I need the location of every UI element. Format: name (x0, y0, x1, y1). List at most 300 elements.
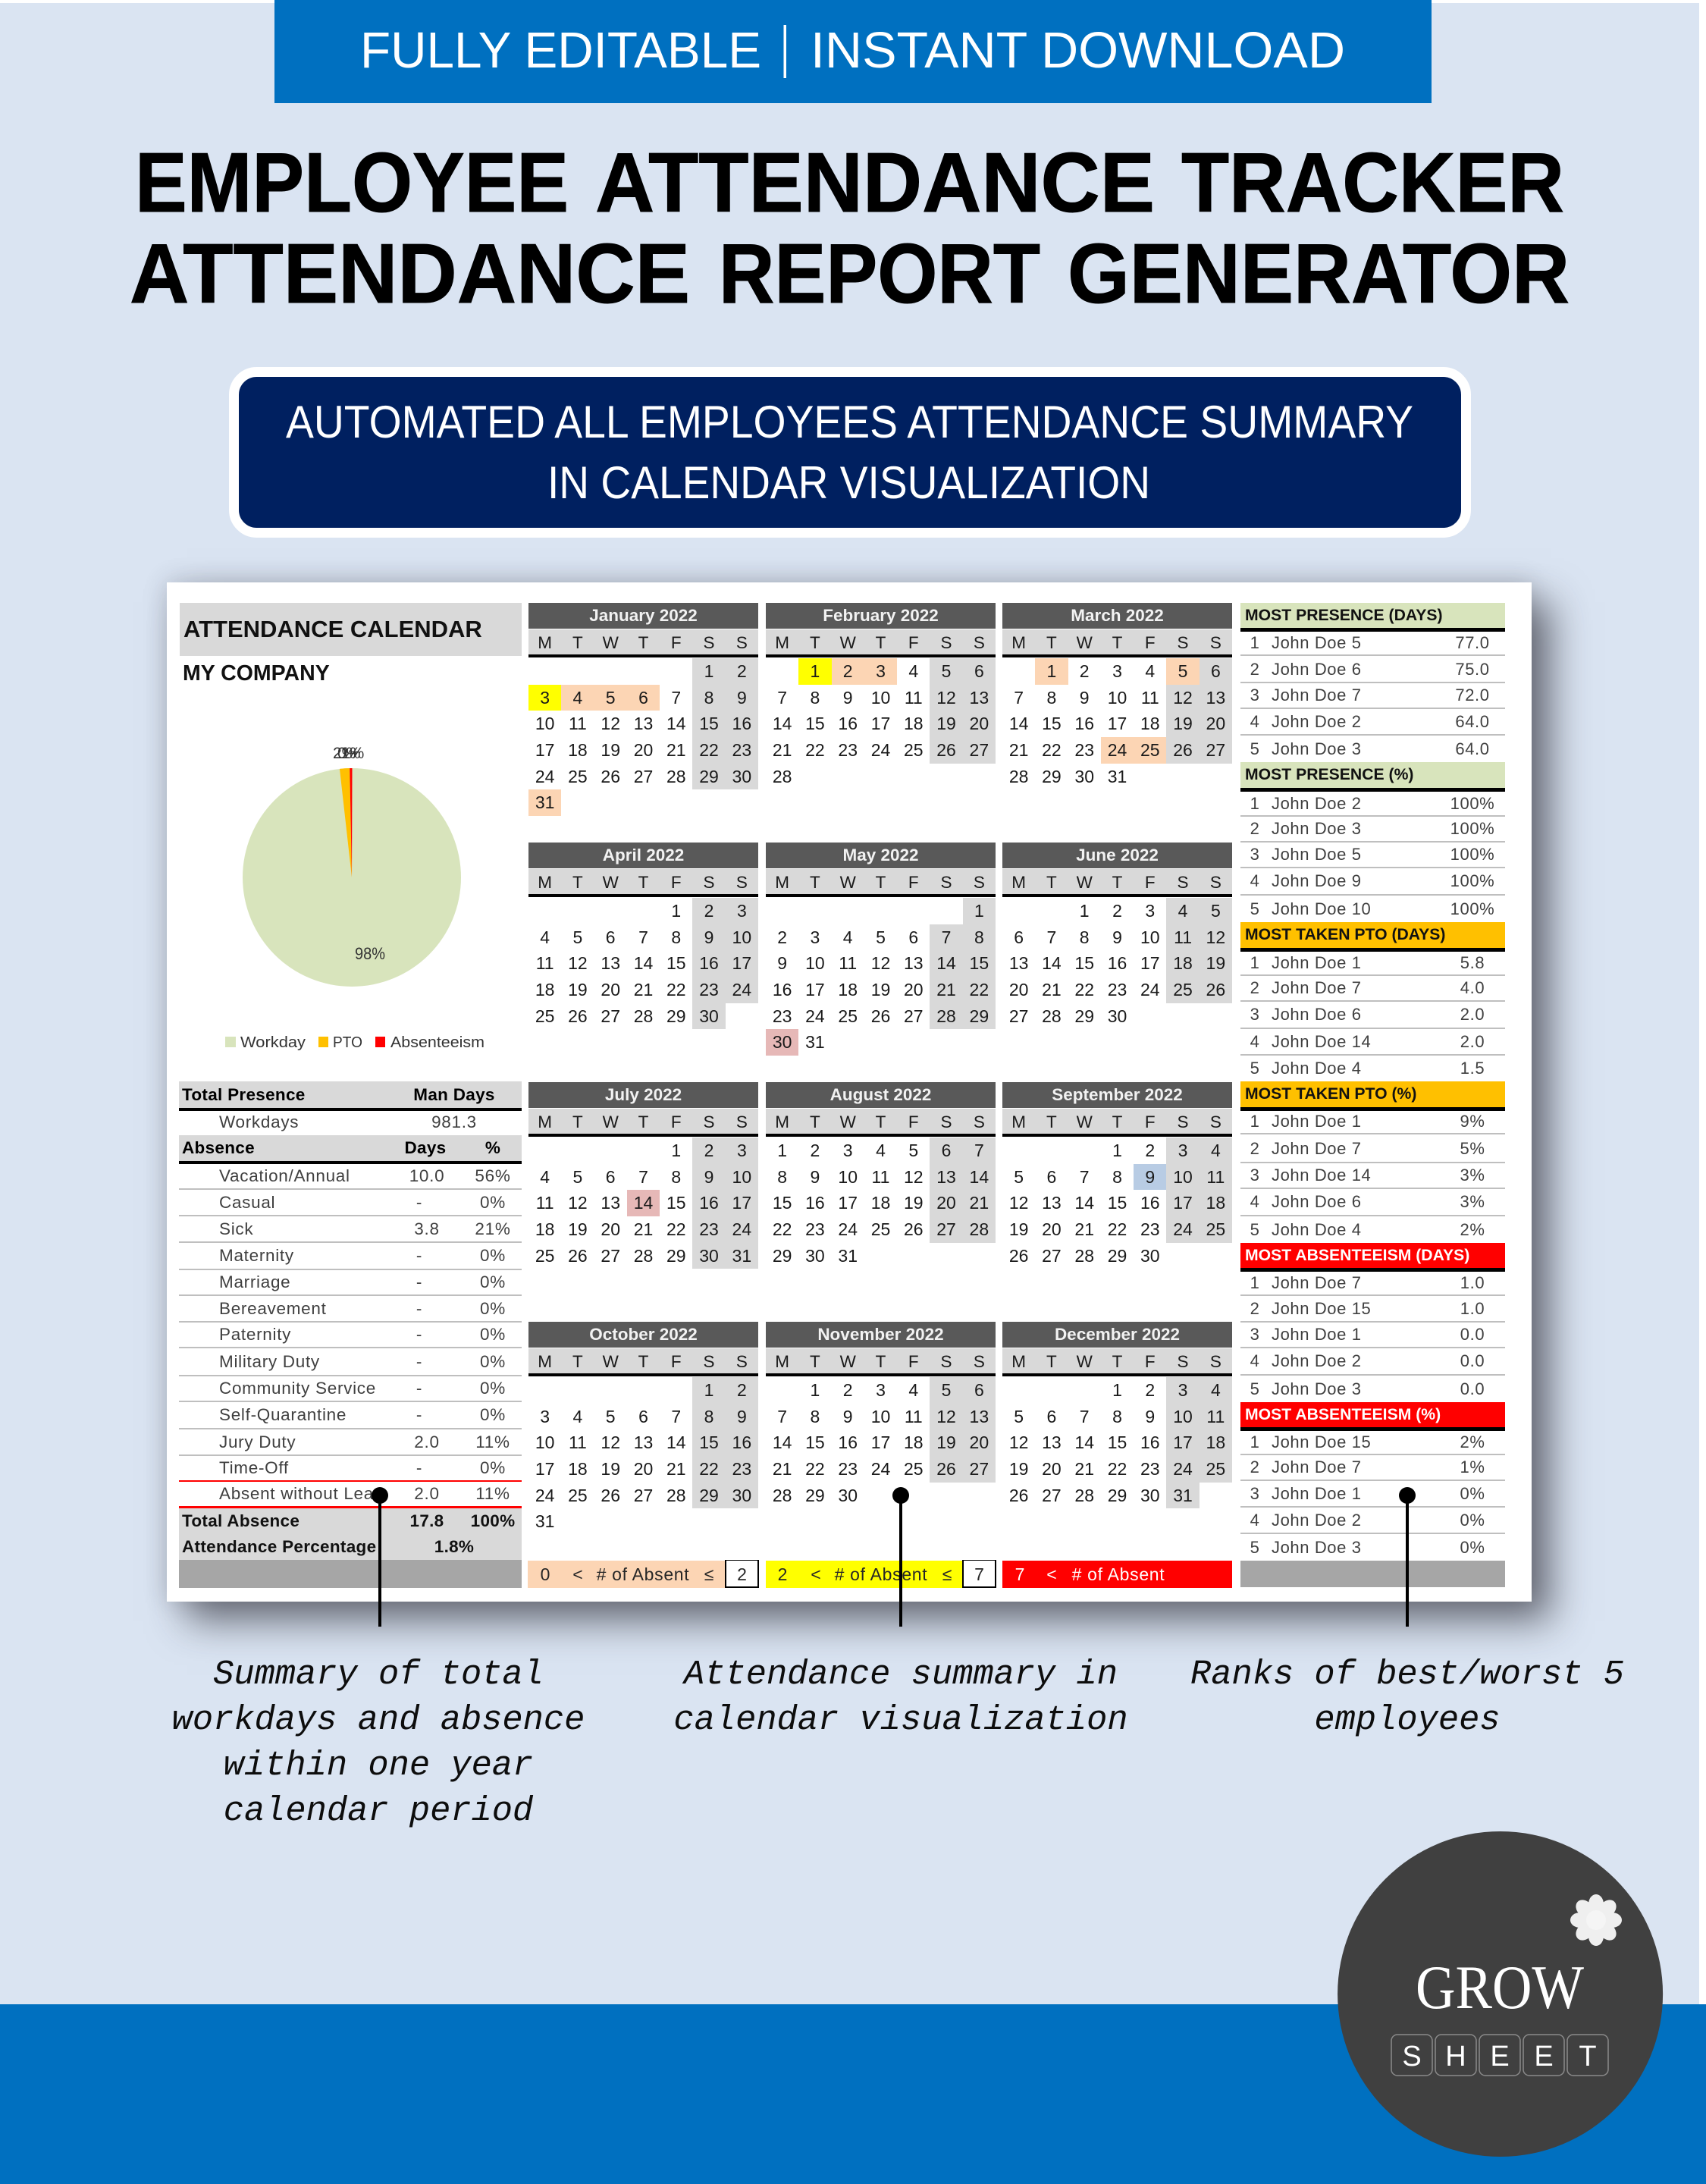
calendar: April 2022: 4 (540, 927, 550, 947)
calendar: February 2022: T (876, 633, 886, 652)
calendar: December 2022: 12 (1009, 1432, 1028, 1452)
calendar: March 2022: 10 (1108, 688, 1127, 708)
calendar: November 2022: S (941, 1352, 952, 1371)
subtitle callout box: AUTOMATED ALL EMPLOYEES ATTENDANCE SUMMARY (286, 397, 1413, 447)
calendar: May 2022: 5 (876, 927, 886, 947)
calendar: January 2022: 18 (568, 740, 588, 760)
calendar: November 2022: 7 (777, 1407, 787, 1426)
calendar: January 2022: 15 (699, 714, 719, 733)
caption: summary: Summary of total (213, 1655, 544, 1694)
ranking: most absenteeism percent: 5 (1250, 1538, 1259, 1556)
ranking: most taken PTO percent (1240, 1081, 1505, 1243)
calendar: March 2022: 27 (1206, 740, 1225, 760)
calendar: December 2022: 18 (1206, 1432, 1225, 1452)
calendar: May 2022: T (810, 873, 820, 892)
calendar: August 2022: 17 (838, 1193, 858, 1213)
calendar: March 2022: 12 (1173, 688, 1193, 708)
calendar: August 2022: 1 (777, 1141, 787, 1160)
calendar: July 2022: 19 (568, 1219, 588, 1239)
calendar: February 2022: S (941, 633, 952, 652)
calendar: January 2022: S (736, 633, 748, 652)
panel: summary table: 10.0 (409, 1166, 444, 1185)
panel: summary table: Jury Duty (219, 1432, 296, 1451)
calendar: December 2022: 25 (1206, 1459, 1225, 1479)
calendar: March 2022: 9 (1080, 688, 1090, 708)
panel: rankings of best and worst employees (1240, 603, 1505, 1587)
calendar: March 2022: 17 (1108, 714, 1127, 733)
ranking: most taken PTO days: MOST TAKEN PTO (DAYS) (1245, 926, 1445, 943)
calendar: December 2022: 10 (1173, 1407, 1193, 1426)
calendar: November 2022: 21 (773, 1459, 792, 1479)
footer band (0, 2004, 1706, 2184)
calendar: September 2022: T (1046, 1112, 1057, 1131)
calendar: July 2022: 21 (634, 1219, 653, 1239)
calendar: November 2022: 25 (904, 1459, 924, 1479)
calendar: October 2022: 23 (732, 1459, 751, 1479)
calendar: March 2022: 3 (1112, 661, 1122, 681)
panel: summary table: 11% (475, 1484, 510, 1503)
calendar: September 2022: 30 (1140, 1246, 1160, 1266)
calendar: October 2022: 25 (568, 1486, 588, 1505)
calendar: October 2022: 29 (699, 1486, 719, 1505)
calendar: December 2022: T (1046, 1352, 1057, 1371)
calendar: December 2022: 11 (1206, 1407, 1225, 1426)
ranking: most absenteeism days: 4 (1250, 1351, 1259, 1370)
calendar: May 2022: T (876, 873, 886, 892)
calendar: November 2022: M (775, 1352, 789, 1371)
ranking: most absenteeism percent: MOST ABSENTEEISM (%) (1245, 1406, 1441, 1423)
calendar: September 2022: 18 (1206, 1193, 1225, 1213)
ranking: most presence percent: 3 (1250, 845, 1259, 864)
calendar: October 2022: 17 (535, 1459, 554, 1479)
calendar: December 2022: 23 (1140, 1459, 1160, 1479)
callout marker: calendar pointer (892, 1487, 909, 1627)
caption: calendar: calendar visualization (673, 1700, 1128, 1740)
panel: summary table: Community Service (219, 1379, 376, 1398)
calendar: July 2022: S (704, 1112, 715, 1131)
calendar: April 2022: S (704, 873, 715, 892)
calendar: January 2022: 8 (704, 688, 713, 708)
calendar: July 2022: T (638, 1112, 648, 1131)
calendar: November 2022: 3 (876, 1380, 886, 1400)
ranking: most absenteeism days: 2 (1250, 1298, 1259, 1318)
calendar: July 2022: 24 (732, 1219, 751, 1239)
calendar: February 2022: 25 (904, 740, 924, 760)
calendar: March 2022: 5 (1178, 661, 1187, 681)
calendar: June 2022: T (1046, 873, 1057, 892)
calendar: April 2022: 10 (732, 927, 751, 947)
calendar: June 2022: 17 (1140, 953, 1160, 973)
calendar: October 2022: 6 (638, 1407, 648, 1426)
calendar: August 2022: 26 (904, 1219, 924, 1239)
calendar: April 2022: 14 (634, 953, 653, 973)
calendar: March 2022: 21 (1009, 740, 1028, 760)
ranking: most absenteeism days (1240, 1243, 1505, 1402)
ranking: most taken PTO percent: 3 (1250, 1166, 1259, 1185)
calendar: July 2022: 8 (671, 1167, 681, 1187)
calendar: January 2022: S (704, 633, 715, 652)
calendar: February 2022: 8 (811, 688, 820, 708)
ranking: most presence percent: 4 (1250, 871, 1259, 890)
calendar: December 2022: 20 (1042, 1459, 1062, 1479)
calendar: March 2022: W (1077, 633, 1093, 652)
calendar: April 2022: 20 (601, 980, 620, 999)
calendar: September 2022: 19 (1009, 1219, 1028, 1239)
ranking: most absenteeism percent: John Doe 3 (1272, 1538, 1362, 1556)
calendar: November 2022: 18 (904, 1432, 924, 1452)
calendar: May 2022: May 2022 (842, 846, 919, 864)
calendar: March 2022: S (1210, 633, 1221, 652)
caption: ranks (1104, 1652, 1706, 1743)
caption: summary: calendar period (224, 1791, 533, 1831)
calendar: October 2022: F (671, 1352, 682, 1371)
calendar: November 2022: November 2022 (817, 1325, 944, 1344)
calendar: December 2022: 3 (1178, 1380, 1187, 1400)
calendar: June 2022: S (1210, 873, 1221, 892)
calendar: February 2022: F (908, 633, 919, 652)
calendar: December 2022: 24 (1173, 1459, 1193, 1479)
calendar: June 2022: 7 (1047, 927, 1056, 947)
calendar: October 2022: 2 (737, 1380, 747, 1400)
calendar: April 2022: 16 (699, 953, 719, 973)
calendar: February 2022: 10 (871, 688, 890, 708)
ranking: most absenteeism days: John Doe 2 (1272, 1351, 1362, 1370)
calendar: December 2022: 29 (1108, 1486, 1127, 1505)
ranking: most taken PTO percent: 3% (1460, 1192, 1485, 1211)
calendar: November 2022: 12 (936, 1407, 956, 1426)
calendar: November 2022: 14 (773, 1432, 792, 1452)
calendar: May 2022: 24 (805, 1006, 825, 1026)
calendar: May 2022: 16 (773, 980, 792, 999)
calendar: September 2022: S (1210, 1112, 1221, 1131)
ranking: most taken PTO days: 3 (1250, 1005, 1259, 1024)
ranking: most presence percent: 100% (1450, 899, 1494, 918)
legend: number of absent colour scale (528, 1561, 1232, 1588)
calendar: January 2022: 2 (737, 661, 747, 681)
panel: summary table: 0% (480, 1458, 506, 1477)
calendar: May 2022: 22 (970, 980, 989, 999)
calendar: December 2022: 15 (1108, 1432, 1127, 1452)
calendar: September 2022: 15 (1108, 1193, 1127, 1213)
calendar: August 2022: 5 (908, 1141, 918, 1160)
calendar: February 2022: 28 (773, 767, 792, 786)
calendar: October 2022: 10 (535, 1432, 554, 1452)
calendar: August 2022: August 2022 (830, 1085, 931, 1104)
ranking: most absenteeism days: John Doe 1 (1272, 1325, 1362, 1344)
calendar: February 2022: 6 (974, 661, 984, 681)
calendar: May 2022: 8 (974, 927, 984, 947)
calendar: August 2022: 12 (904, 1167, 924, 1187)
ranking: most taken PTO days: 4 (1250, 1031, 1259, 1051)
panel: summary table: 0% (480, 1325, 506, 1344)
calendar: November 2022: 13 (970, 1407, 989, 1426)
calendar: November 2022: 16 (838, 1432, 858, 1452)
banner: fully editable: FULLY EDITABLE (360, 22, 761, 79)
panel: attendance calendar title and pie chart (180, 603, 522, 1051)
ranking: most taken PTO percent: John Doe 4 (1272, 1219, 1362, 1239)
ranking: most presence percent: John Doe 9 (1272, 871, 1362, 890)
calendar: January 2022: W (603, 633, 619, 652)
ranking: most absenteeism days: 5 (1250, 1379, 1259, 1398)
calendar: October 2022: 31 (535, 1511, 554, 1531)
calendar: January 2022: 3 (540, 688, 550, 708)
calendar: April 2022: T (572, 873, 583, 892)
calendar: January 2022: 25 (568, 767, 588, 786)
panel: summary table: 3.8 (414, 1219, 440, 1238)
ranking: most taken PTO percent: John Doe 7 (1272, 1139, 1362, 1158)
calendar: January 2022: 9 (737, 688, 747, 708)
calendar: January 2022: 11 (569, 714, 587, 733)
calendar: June 2022: 29 (1074, 1006, 1094, 1026)
calendar: February 2022: 20 (970, 714, 989, 733)
panel: summary table: Absent without Lea (219, 1484, 374, 1503)
calendar: September 2022 (1002, 1082, 1232, 1266)
calendar: July 2022: 28 (634, 1246, 653, 1266)
calendar: November 2022: 11 (905, 1407, 923, 1426)
ranking: most presence percent: 5 (1250, 899, 1259, 918)
panel: summary table: Paternity (219, 1325, 291, 1344)
ranking: most presence days: 2 (1250, 660, 1259, 678)
ranking: most taken PTO percent: 2% (1460, 1219, 1485, 1239)
calendar: June 2022: 19 (1206, 953, 1225, 973)
calendar: May 2022: 28 (936, 1006, 956, 1026)
calendar: August 2022: 22 (773, 1219, 792, 1239)
callout marker: ranks pointer (1399, 1487, 1416, 1627)
calendar: April 2022: 3 (737, 901, 747, 921)
calendar: August 2022: 28 (970, 1219, 989, 1239)
calendar: December 2022: December 2022 (1055, 1325, 1180, 1344)
pie chart: 1% (341, 745, 364, 762)
ranking: most absenteeism days: 0.0 (1460, 1351, 1485, 1370)
calendar: October 2022: 4 (573, 1407, 582, 1426)
calendar: March 2022: 30 (1074, 767, 1094, 786)
calendar: April 2022: 1 (671, 901, 681, 921)
caption: summary (75, 1652, 682, 1834)
legend item: yellow range: < (811, 1564, 821, 1584)
heading: attendance calendar: ATTENDANCE CALENDAR (183, 616, 482, 642)
panel: summary table: - (416, 1325, 422, 1344)
calendar: December 2022: 27 (1042, 1486, 1062, 1505)
calendar: August 2022: 27 (936, 1219, 956, 1239)
calendar: August 2022: 31 (838, 1246, 858, 1266)
calendar: December 2022: 9 (1145, 1407, 1155, 1426)
calendar: October 2022: 9 (737, 1407, 747, 1426)
caption: ranks: Ranks of best/worst 5 (1190, 1655, 1624, 1694)
calendar: April 2022: 23 (699, 980, 719, 999)
calendar: May 2022: F (908, 873, 919, 892)
ranking: most presence percent: 100% (1450, 871, 1494, 890)
calendar: June 2022: 12 (1206, 927, 1225, 947)
calendar: January 2022: 29 (699, 767, 719, 786)
calendar: December 2022: 13 (1042, 1432, 1062, 1452)
calendar: October 2022: M (538, 1352, 552, 1371)
ranking: most presence days: 72.0 (1455, 686, 1490, 704)
calendar: January 2022: 13 (634, 714, 653, 733)
calendar: June 2022: T (1112, 873, 1122, 892)
calendar: October 2022: 27 (634, 1486, 653, 1505)
calendar: May 2022: 17 (805, 980, 825, 999)
calendar: August 2022 (766, 1082, 996, 1266)
calendar: September 2022: 20 (1042, 1219, 1062, 1239)
calendar: June 2022: 25 (1173, 980, 1193, 999)
calendar: September 2022: M (1011, 1112, 1026, 1131)
calendar: June 2022 (1002, 843, 1232, 1026)
calendar: May 2022: 12 (871, 953, 890, 973)
calendar: March 2022: 20 (1206, 714, 1225, 733)
calendar: June 2022: 30 (1108, 1006, 1127, 1026)
ranking: most taken PTO days: John Doe 4 (1272, 1059, 1362, 1078)
calendar: September 2022: 22 (1108, 1219, 1127, 1239)
calendar: February 2022: 16 (838, 714, 858, 733)
calendar: June 2022: F (1145, 873, 1156, 892)
ranking: most absenteeism days: 0.0 (1460, 1379, 1485, 1398)
calendar: October 2022: W (603, 1352, 619, 1371)
calendar: May 2022: 31 (805, 1032, 825, 1052)
calendar: November 2022: T (810, 1352, 820, 1371)
calendar: May 2022: 29 (970, 1006, 989, 1026)
calendar: February 2022: 21 (773, 740, 792, 760)
legend item: red range (1002, 1561, 1232, 1588)
calendar: July 2022: 26 (568, 1246, 588, 1266)
calendar: June 2022: W (1077, 873, 1093, 892)
panel: summary table: Attendance Percentage (182, 1536, 376, 1556)
calendar: November 2022: 5 (942, 1380, 951, 1400)
calendar: August 2022: 15 (773, 1193, 792, 1213)
calendar: April 2022: 5 (573, 927, 582, 947)
panel: summary table: Maternity (219, 1246, 294, 1265)
calendar: November 2022: 10 (871, 1407, 890, 1426)
calendar: November 2022 (766, 1322, 996, 1536)
ranking: most absenteeism percent: 2% (1460, 1432, 1485, 1451)
calendar: October 2022: 8 (704, 1407, 713, 1426)
calendar: August 2022: F (908, 1112, 919, 1131)
calendar: March 2022: 1 (1047, 661, 1056, 681)
calendar: February 2022: 22 (805, 740, 825, 760)
calendar: July 2022: 1 (671, 1141, 681, 1160)
ranking: most absenteeism days: John Doe 15 (1272, 1298, 1371, 1318)
panel: summary table: 21% (475, 1219, 511, 1238)
calendar: September 2022: 10 (1173, 1167, 1193, 1187)
calendar: March 2022: 29 (1042, 767, 1062, 786)
panel: summary table: - (416, 1458, 422, 1477)
calendar: November 2022: W (840, 1352, 856, 1371)
calendar: September 2022: 8 (1112, 1167, 1122, 1187)
calendar: February 2022: W (840, 633, 856, 652)
calendar: May 2022: 2 (777, 927, 787, 947)
calendar: September 2022: 21 (1074, 1219, 1094, 1239)
calendar: December 2022: T (1112, 1352, 1122, 1371)
calendar: August 2022: 21 (970, 1193, 989, 1213)
header: banner, title and subtitle (130, 0, 1570, 538)
legend: number of absent colour scale: 7 (974, 1564, 984, 1584)
calendar: August 2022: 2 (811, 1141, 820, 1160)
calendar: May 2022: 9 (777, 953, 787, 973)
ranking: most presence days: John Doe 2 (1272, 711, 1362, 731)
ranking: most taken PTO days: John Doe 7 (1272, 978, 1362, 997)
calendar: October 2022: 28 (666, 1486, 686, 1505)
calendar: May 2022: S (974, 873, 985, 892)
calendar: January 2022: 24 (535, 767, 554, 786)
calendar: October 2022: 16 (732, 1432, 751, 1452)
calendar: July 2022: 30 (699, 1246, 719, 1266)
calendar: March 2022: 28 (1009, 767, 1028, 786)
calendar: June 2022: June 2022 (1076, 846, 1159, 864)
calendar: August 2022: 30 (805, 1246, 825, 1266)
ranking: most absenteeism percent: John Doe 7 (1272, 1458, 1362, 1476)
calendar: July 2022 (528, 1082, 758, 1269)
calendar: January 2022: 28 (666, 767, 686, 786)
calendar: March 2022: T (1112, 633, 1122, 652)
calendar: August 2022: S (974, 1112, 985, 1131)
calendar: February 2022: 12 (936, 688, 956, 708)
calendar: July 2022: 2 (704, 1141, 713, 1160)
legend item: red range: 7 (1015, 1564, 1024, 1584)
calendar: February 2022: 14 (773, 714, 792, 733)
calendar: August 2022: M (775, 1112, 789, 1131)
calendar: September 2022: 24 (1173, 1219, 1193, 1239)
subtitle callout box: IN CALENDAR VISUALIZATION (547, 457, 1150, 508)
calendar: July 2022: July 2022 (605, 1085, 682, 1104)
calendar: March 2022: 2 (1080, 661, 1090, 681)
calendar: July 2022: 31 (732, 1246, 751, 1266)
panel: summary table: - (416, 1351, 422, 1371)
ranking: most presence days: MOST PRESENCE (DAYS) (1245, 607, 1443, 624)
ranking: most taken PTO days: John Doe 14 (1272, 1031, 1371, 1051)
ranking: most taken PTO percent: 9% (1460, 1112, 1485, 1130)
panel: summary table: 2.0 (414, 1432, 440, 1451)
calendar: July 2022: 20 (601, 1219, 620, 1239)
title: ATTENDANCE (595, 136, 1155, 230)
calendar: April 2022: 11 (536, 953, 554, 973)
calendar: May 2022: 10 (805, 953, 825, 973)
calendar: December 2022: 26 (1009, 1486, 1028, 1505)
ranking: most absenteeism percent: John Doe 15 (1272, 1432, 1371, 1451)
calendar: July 2022: 4 (540, 1167, 550, 1187)
calendar: October 2022: 26 (601, 1486, 620, 1505)
calendar: December 2022: W (1077, 1352, 1093, 1371)
wordmark: SHEET keys: T (1579, 2041, 1597, 2073)
ranking: most presence days: 75.0 (1455, 660, 1490, 678)
calendar: May 2022: 13 (904, 953, 924, 973)
calendar: September 2022: 14 (1074, 1193, 1094, 1213)
ranking: most taken PTO days: 4.0 (1460, 978, 1485, 997)
calendar: May 2022: M (775, 873, 789, 892)
calendar: February 2022: M (775, 633, 789, 652)
calendar: July 2022: 13 (601, 1193, 620, 1213)
calendar: August 2022: 24 (838, 1219, 858, 1239)
calendar: June 2022: 22 (1074, 980, 1094, 999)
calendar: November 2022: 4 (908, 1380, 918, 1400)
calendar: May 2022: 11 (839, 953, 857, 973)
calendar: October 2022: 18 (568, 1459, 588, 1479)
calendar: May 2022: S (941, 873, 952, 892)
calendar: September 2022: 2 (1145, 1141, 1155, 1160)
calendar: May 2022: 3 (811, 927, 820, 947)
wordmark: SHEET keys: S (1402, 2041, 1422, 2073)
calendar: September 2022: 13 (1042, 1193, 1062, 1213)
ranking: most absenteeism days: John Doe 7 (1272, 1273, 1362, 1292)
calendar: August 2022: 9 (811, 1167, 820, 1187)
calendar: April 2022: 13 (601, 953, 620, 973)
calendar: March 2022: F (1145, 633, 1156, 652)
calendar: August 2022: 10 (838, 1167, 858, 1187)
calendar: May 2022: 1 (974, 901, 984, 921)
ranking: most absenteeism percent: 2 (1250, 1458, 1259, 1476)
pie chart: 2% (333, 745, 356, 762)
calendar: July 2022: 27 (601, 1246, 620, 1266)
calendar: July 2022: 25 (535, 1246, 554, 1266)
calendar: May 2022: 19 (871, 980, 890, 999)
